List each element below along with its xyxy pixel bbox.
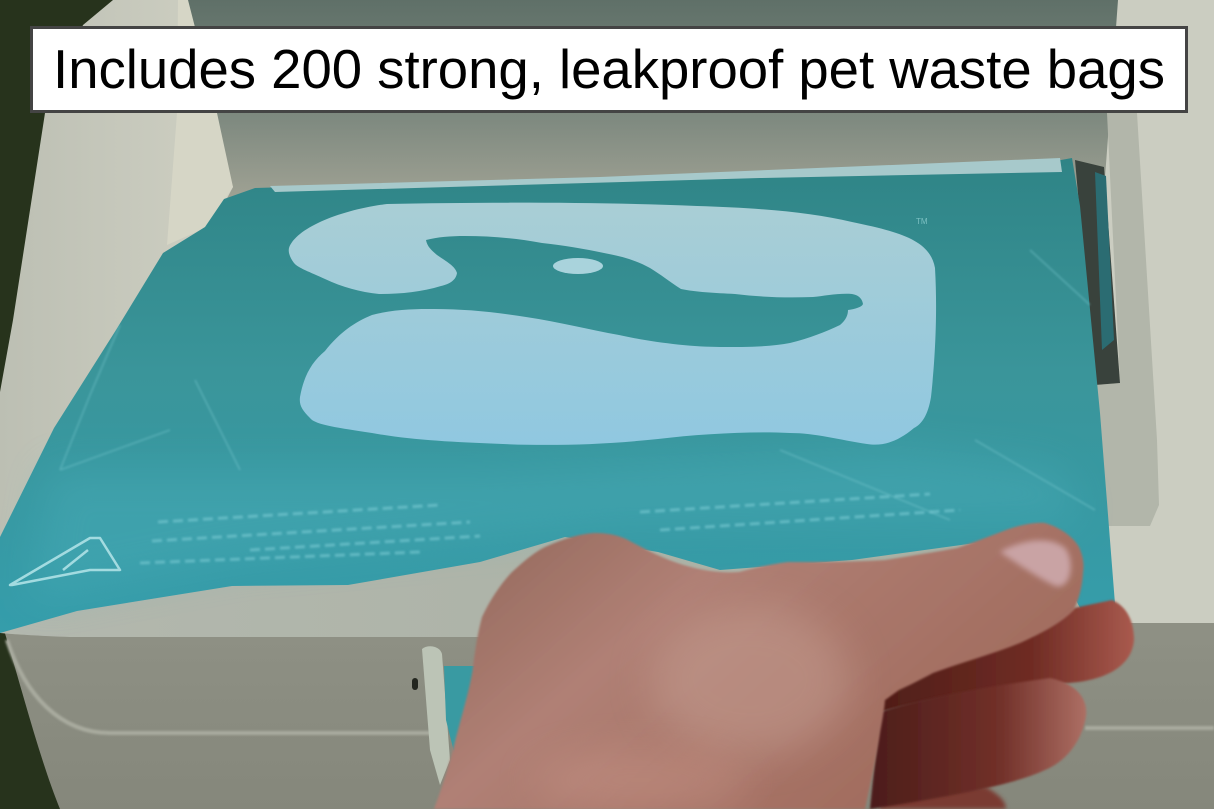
hand: back of hand highlight [650,605,850,755]
dispenser: upper lid lip [0,500,1120,637]
title caption [30,26,1188,113]
paper edge at top of the bag [270,158,1062,192]
hand: fourth finger [880,787,1006,809]
bag printed warning text [140,494,960,563]
hand: thumb nail [1000,540,1071,586]
bag highlight: lower sweep [30,450,1080,600]
hand: index finger [880,600,1134,712]
dispenser: dark slot beside the roll [1075,160,1120,385]
dispenser: hinge [412,646,476,785]
hand [434,523,1134,809]
hand: middle finger [870,678,1086,809]
dispenser: lower body [4,615,1214,809]
dispenser: front seam line [7,640,1214,733]
title caption: Includes 200 strong, leakproof pet waste bags [53,39,1165,100]
logo: silhouette [289,203,936,445]
hand: palm and thumb [434,523,1084,809]
bag corner triangle icon [10,538,120,585]
bag logo: pale rounded dog shape [289,203,936,445]
dispenser: right wing recess [1095,113,1159,526]
bag wrinkles [60,250,1095,520]
dispenser: left wing [0,0,233,560]
dispenser: teal roll spindle [1095,172,1114,350]
dispenser: right wing [1090,0,1214,623]
dispenser: left wing inner band [167,0,233,245]
logo: trademark mark: TM [916,217,928,226]
dispenser: rear inner wall [170,0,1130,200]
teal bag [0,158,1115,633]
logo: dog eye [553,258,603,274]
hand: knuckle highlight [530,750,750,809]
